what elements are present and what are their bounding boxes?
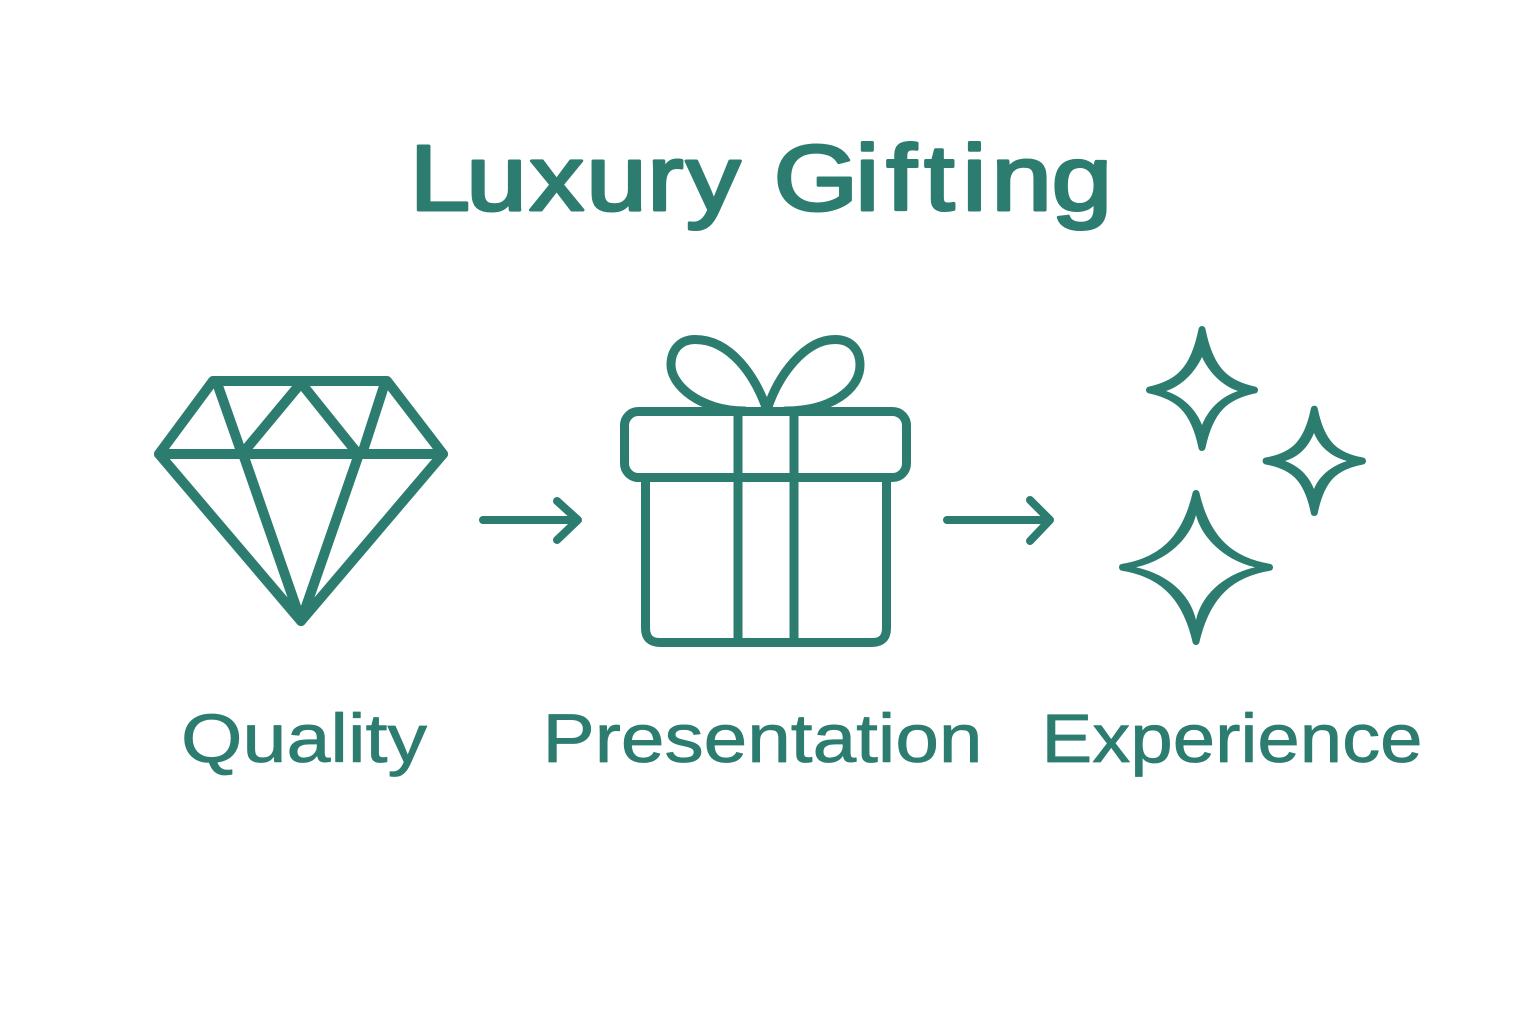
icon: gift box — [624, 340, 906, 642]
title: Luxury Gifting — [410, 126, 1112, 230]
icon: sparkles — [1122, 330, 1362, 642]
label: experience: Experience — [1042, 700, 1422, 777]
label: quality: Quality — [181, 700, 428, 777]
label: presentation: Presentation — [542, 700, 982, 777]
arrow: presentation to experience — [947, 500, 1050, 541]
icon: diamond — [159, 381, 443, 621]
arrow: quality to presentation — [483, 501, 578, 540]
